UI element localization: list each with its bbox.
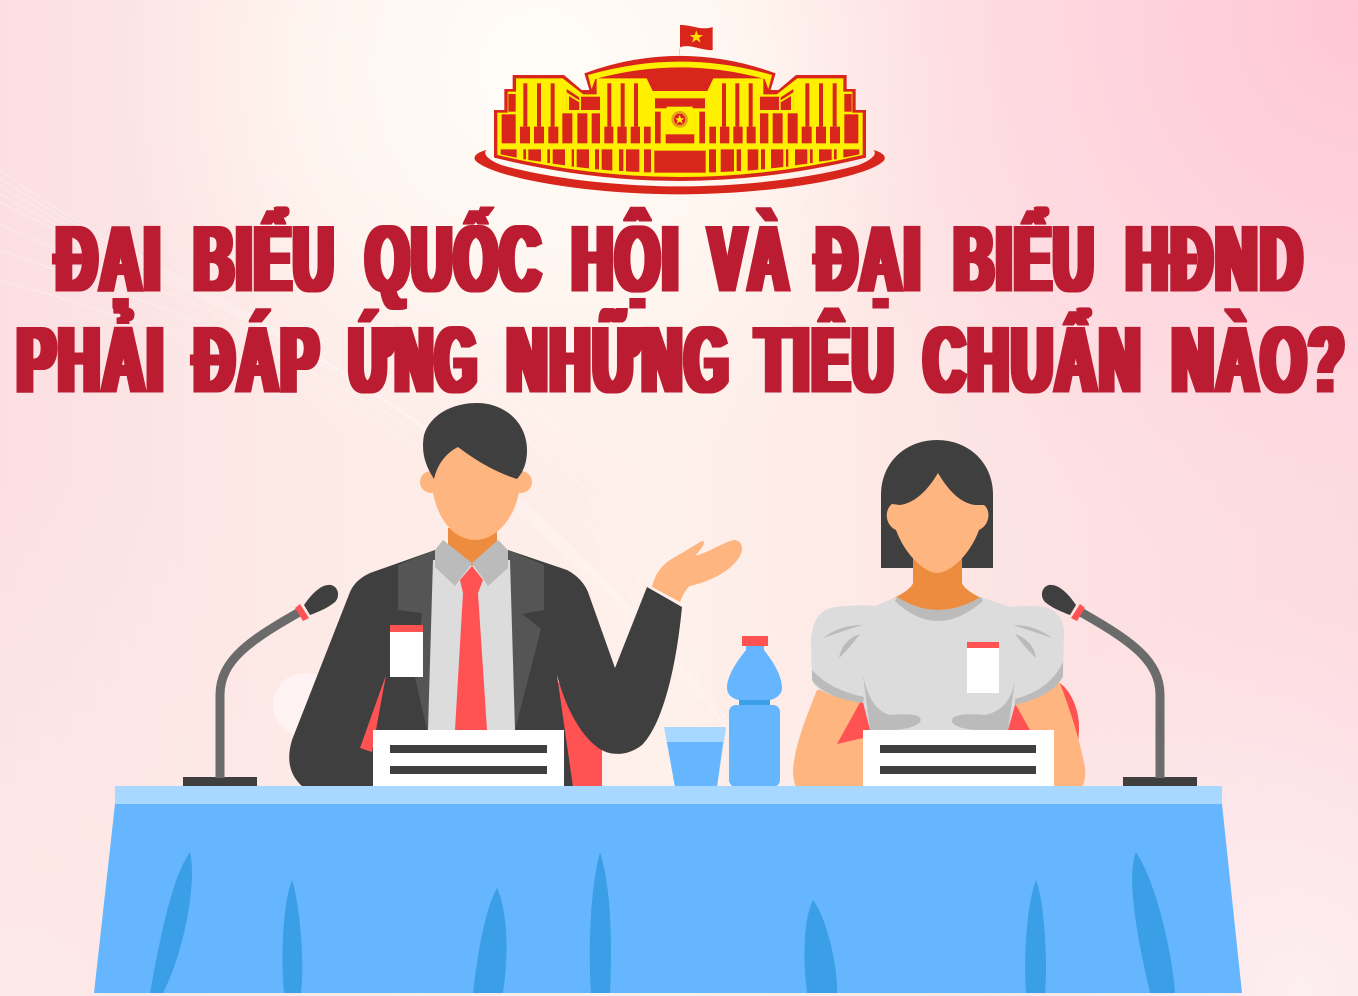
face <box>887 473 988 573</box>
ears <box>420 471 442 493</box>
title: BIỂU <box>194 206 336 311</box>
red lining right <box>550 670 602 787</box>
title: HỘI <box>572 206 681 311</box>
title: ĐÁP <box>194 307 321 412</box>
arms <box>793 683 1085 787</box>
title: ỨNG <box>349 307 479 412</box>
title: BIỂU <box>954 206 1096 311</box>
hair <box>881 440 993 568</box>
shirt <box>428 560 515 730</box>
icon: Vietnamese flag <box>680 25 713 55</box>
person: man <box>289 403 742 787</box>
title: NHỮNG <box>507 307 731 412</box>
hair <box>423 403 527 479</box>
title: VÀ <box>709 206 791 311</box>
cloth folds <box>150 852 1175 993</box>
title: QUỐC <box>366 206 543 311</box>
emblem box <box>667 107 693 133</box>
building silhouette <box>494 56 866 181</box>
water bottle <box>727 636 782 787</box>
title <box>17 206 1347 412</box>
title: ĐẠI <box>816 206 923 311</box>
microphone: left <box>183 585 338 787</box>
person: woman <box>793 440 1085 787</box>
neck <box>890 550 985 625</box>
title: PHẢI <box>17 307 166 412</box>
jacket and arm <box>289 550 682 787</box>
title: CHUẨN <box>924 306 1143 412</box>
collar <box>435 540 472 586</box>
badge <box>390 625 423 677</box>
red chair <box>1050 683 1079 760</box>
blouse shading <box>812 597 1063 730</box>
dome stripe <box>588 62 772 89</box>
badge <box>967 642 999 693</box>
microphone: right <box>1042 585 1197 787</box>
title: ĐẠI <box>56 206 163 311</box>
hand <box>652 540 742 602</box>
red lining left <box>360 675 386 752</box>
building yellow facade <box>497 78 863 177</box>
title: TIÊU <box>756 307 896 412</box>
water glass <box>664 727 726 787</box>
blouse <box>811 597 1064 730</box>
lapels <box>398 550 436 730</box>
neck <box>448 528 497 566</box>
base swoosh <box>475 150 885 194</box>
face <box>432 446 520 540</box>
emblem: National Assembly building with flag <box>475 25 885 194</box>
name plate <box>863 730 1054 787</box>
red lining <box>837 697 900 787</box>
table with blue cloth <box>94 786 1242 993</box>
tie <box>455 566 487 730</box>
name plate <box>373 730 564 787</box>
